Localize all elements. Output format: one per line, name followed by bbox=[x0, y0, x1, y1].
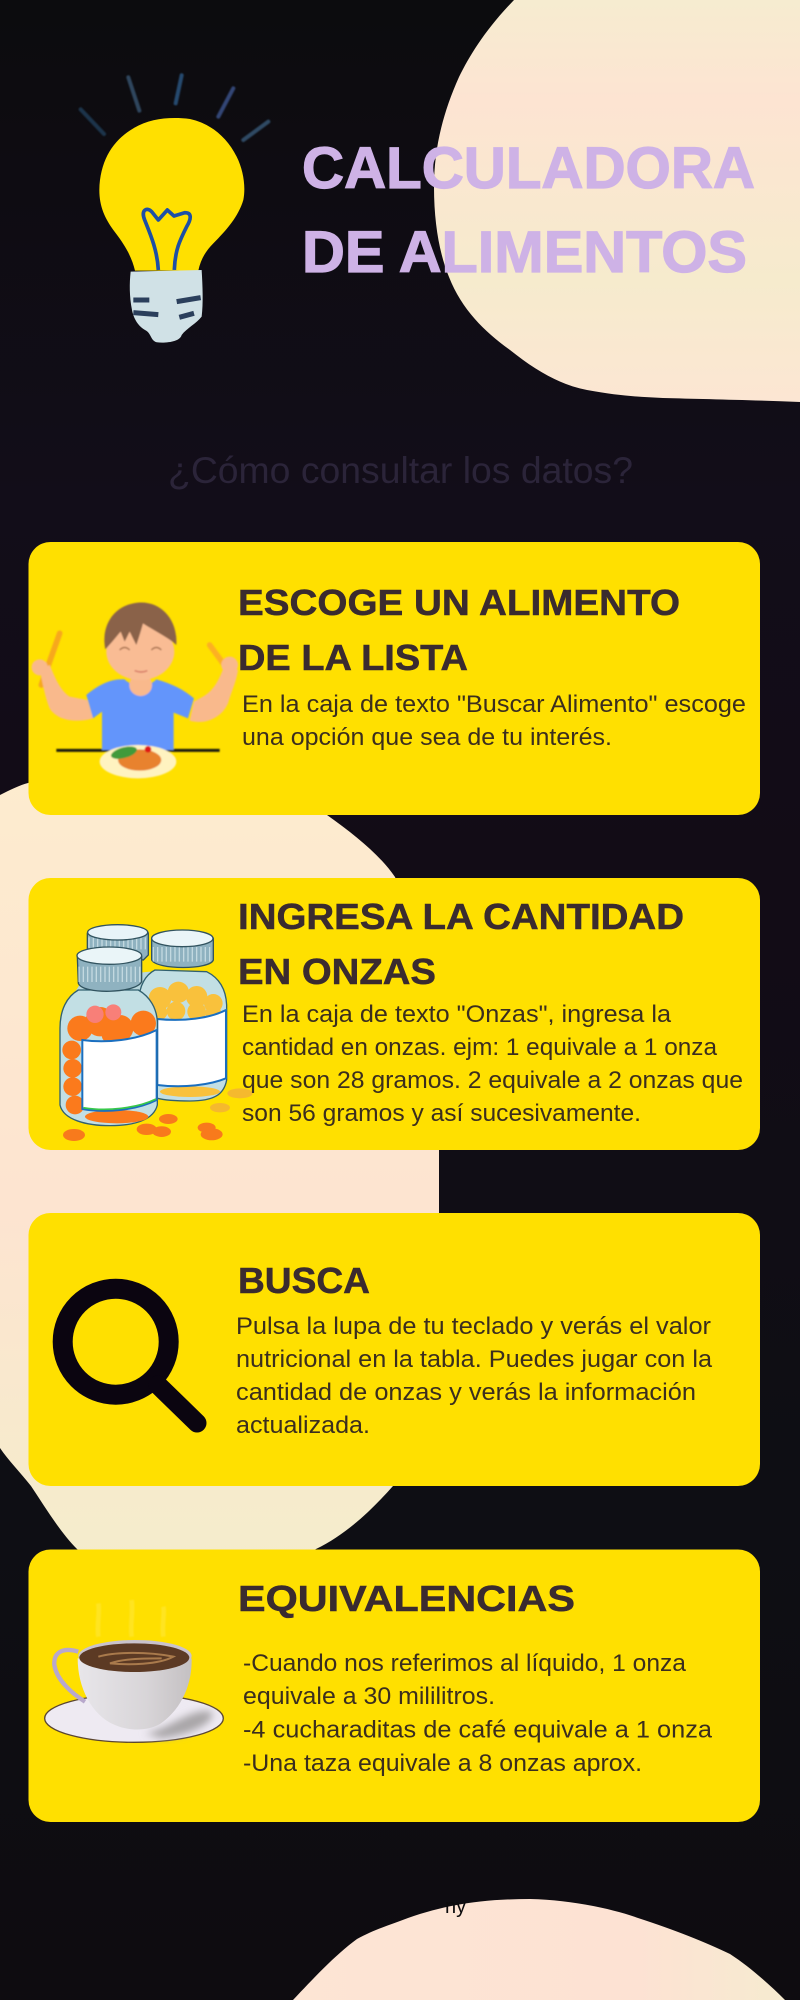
back bottle cap bbox=[87, 926, 148, 960]
body text: -Una taza equivale a 8 onzas aprox. bbox=[243, 1750, 642, 1777]
body text: cantidad de onzas y verás la información bbox=[236, 1379, 696, 1406]
footer text fragment: ny bbox=[445, 1896, 466, 1918]
bulb glass bbox=[99, 118, 244, 271]
body text bbox=[243, 1650, 712, 1777]
illustration: pill bottles bbox=[60, 925, 253, 1141]
body text bbox=[242, 691, 746, 751]
illustration: boy eating bbox=[32, 603, 238, 778]
body text: que son 28 gramos. 2 equivale a 2 onzas que bbox=[242, 1067, 743, 1094]
icon: light bulb bbox=[81, 75, 268, 343]
body text: una opción que sea de tu interés. bbox=[242, 724, 612, 751]
illustration: coffee cup bbox=[45, 1600, 223, 1742]
heading: EQUIVALENCIAS bbox=[238, 1578, 575, 1619]
body text: cantidad en onzas. ejm: 1 equivale a 1 onza bbox=[242, 1034, 717, 1061]
bulb rays bbox=[81, 75, 268, 140]
title: CALCULADORA bbox=[302, 136, 755, 201]
blob: left middle bbox=[0, 762, 439, 1576]
subtitle: ¿Cómo consultar los datos? bbox=[168, 450, 633, 491]
heading: DE LA LISTA bbox=[238, 637, 468, 678]
left bottle bbox=[60, 990, 157, 1126]
card background bbox=[28, 878, 760, 1150]
heading bbox=[238, 896, 684, 992]
card background bbox=[28, 1213, 760, 1486]
loose pills bbox=[63, 1114, 223, 1141]
heading: EN ONZAS bbox=[238, 951, 436, 992]
icon: magnifying glass bbox=[63, 1289, 197, 1423]
bulb filament bbox=[143, 209, 190, 270]
card background bbox=[28, 542, 760, 815]
bulb base bbox=[130, 270, 203, 343]
heading bbox=[238, 582, 680, 678]
heading: ESCOGE UN ALIMENTO bbox=[238, 582, 680, 623]
right bottle bbox=[139, 970, 227, 1101]
body text: En la caja de texto "Buscar Alimento" escoge bbox=[242, 691, 746, 718]
blob: bottom bbox=[293, 1899, 785, 2000]
heading: BUSCA bbox=[238, 1260, 370, 1301]
body text: Pulsa la lupa de tu teclado y verás el valor bbox=[236, 1313, 711, 1340]
title: DE ALIMENTOS bbox=[302, 220, 747, 285]
body text: En la caja de texto "Onzas", ingresa la bbox=[242, 1001, 671, 1028]
body text: -4 cucharaditas de café equivale a 1 onza bbox=[243, 1716, 712, 1744]
body text bbox=[236, 1313, 712, 1439]
panel: equivalencias bbox=[28, 1550, 760, 1822]
blob: top right bbox=[434, 0, 800, 402]
bulb base marks bbox=[133, 298, 201, 317]
body text: actualizada. bbox=[236, 1412, 370, 1439]
heading: INGRESA LA CANTIDAD bbox=[238, 896, 684, 937]
card background bbox=[28, 1550, 760, 1822]
body text: equivale a 30 mililitros. bbox=[243, 1683, 495, 1710]
title bbox=[302, 136, 755, 285]
body text bbox=[242, 1001, 743, 1127]
panel: escoge un alimento bbox=[28, 542, 760, 815]
panel: busca bbox=[28, 1213, 760, 1486]
body text: son 56 gramos y así sucesivamente. bbox=[242, 1100, 641, 1127]
body text: -Cuando nos referimos al líquido, 1 onza bbox=[243, 1650, 686, 1677]
body text: nutricional en la tabla. Puedes jugar con la bbox=[236, 1346, 712, 1373]
panel: ingresa la cantidad bbox=[28, 878, 760, 1150]
